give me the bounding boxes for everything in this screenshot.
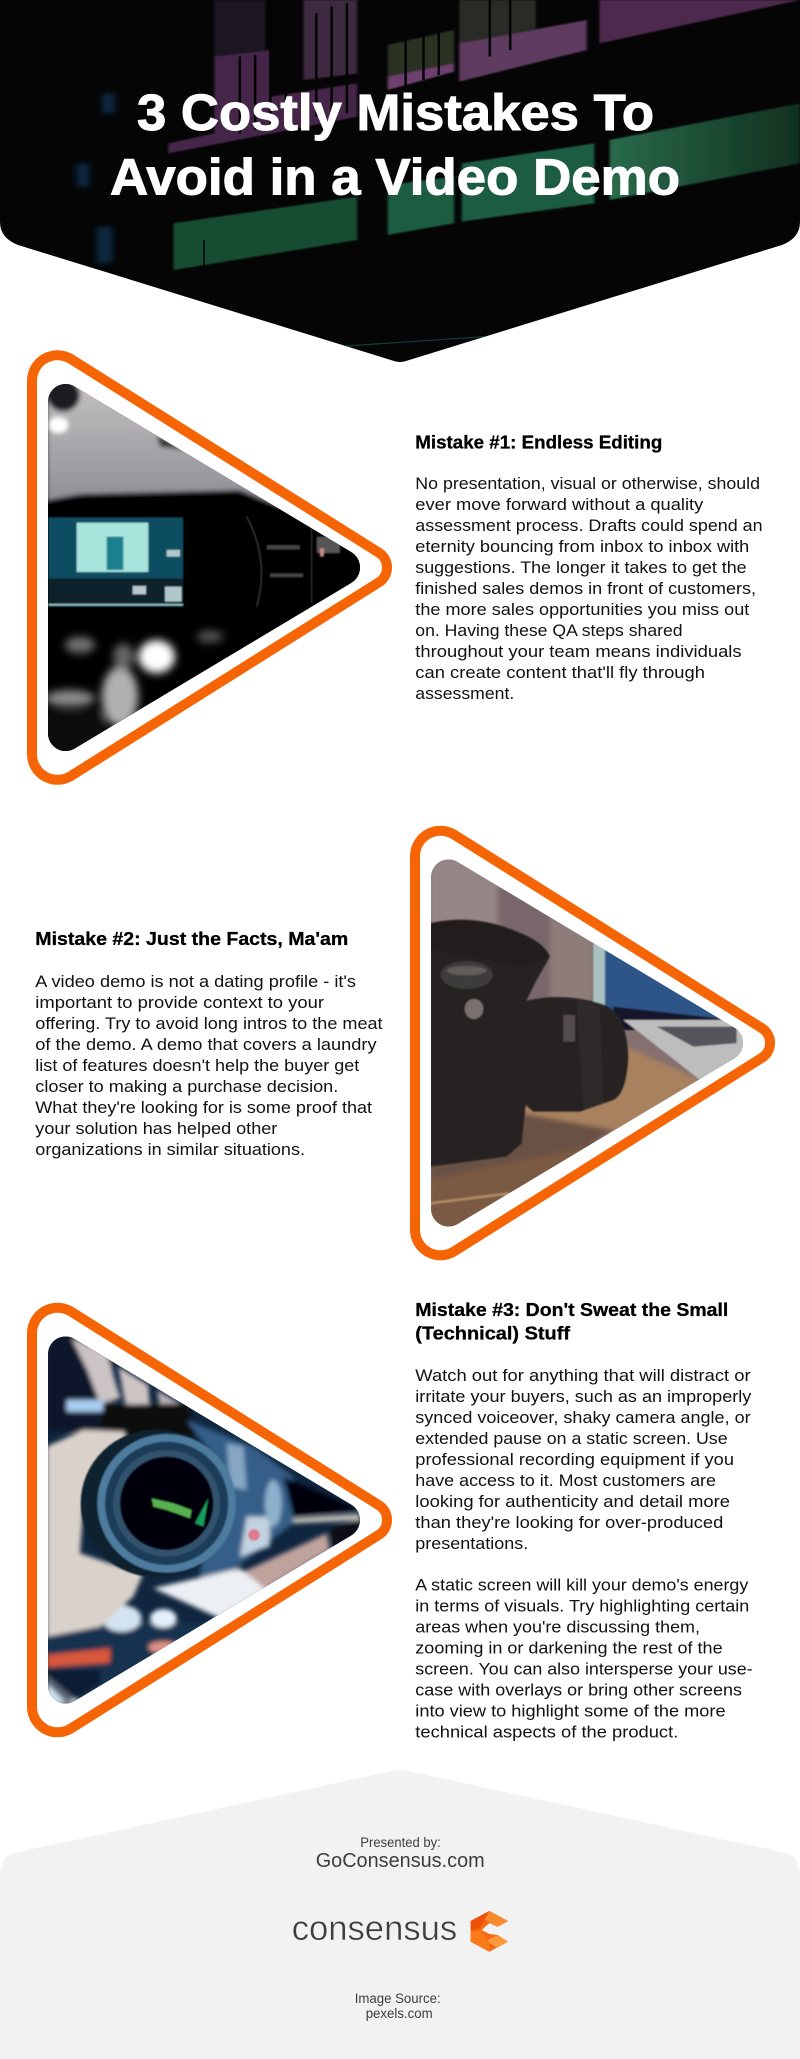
body text: paragraph 2: technical aspects of the product. [415, 1722, 678, 1742]
body text: paragraph 1: Watch out for anything that will distract or [415, 1366, 751, 1385]
body text: A video demo is not a dating profile - it's [35, 972, 356, 991]
body text: paragraph 1: have access to it. Most customers are [415, 1471, 716, 1490]
consensus wordmark: consensus [292, 1909, 457, 1948]
presented by: Presented by: [360, 1835, 441, 1850]
body text: paragraph 2: areas when you're discussing them, [415, 1618, 700, 1636]
body text: assessment process. Drafts could spend an [415, 516, 763, 535]
body text [35, 972, 383, 1159]
body text: offering. Try to avoid long intros to the meat [35, 1014, 383, 1033]
panel: mistake 2 [35, 831, 770, 1255]
body text: organizations in similar situations. [35, 1140, 305, 1159]
body text: No presentation, visual or otherwise, should [415, 474, 760, 493]
body text: paragraph 1: synced voiceover, shaky camera angle, or [415, 1408, 751, 1427]
body text: paragraph 2: into view to highlight some of the more [415, 1702, 726, 1720]
image source [355, 1991, 441, 2021]
heading: Mistake #2: Just the Facts, Ma'am [35, 928, 348, 949]
body text: suggestions. The longer it takes to get the [415, 558, 747, 577]
body text: list of features doesn't help the buyer get [35, 1056, 360, 1075]
body text: of the demo. A demo that covers a laundry [35, 1035, 377, 1054]
body text: paragraph 2: zooming in or darkening the rest of the [415, 1638, 723, 1658]
title [110, 84, 680, 206]
body text: paragraph 2: A static screen will kill your demo's energy [415, 1576, 749, 1594]
body text [415, 474, 763, 703]
body text: What they're looking for is some proof that [35, 1098, 372, 1117]
photo: DSLR camera on wooden table [430, 858, 747, 1230]
image source: pexels.com [366, 2006, 433, 2021]
heading: Mistake #3: Don't Sweat the Small [415, 1299, 728, 1320]
body text: paragraph 2: case with overlays or bring other screens [415, 1680, 742, 1700]
heading: Mistake #1: Endless Editing [415, 431, 662, 452]
body text: can create content that'll fly through [415, 663, 705, 682]
body text: paragraph 1: looking for authenticity and detail more [415, 1492, 730, 1511]
body text: paragraph 2: screen. You can also intersperse your use- [415, 1660, 753, 1678]
panel: mistake 3 [32, 1299, 753, 1742]
header banner [0, 0, 800, 363]
body text: finished sales demos in front of customers, [415, 579, 756, 598]
photo: hands holding camera lens [47, 1335, 362, 1707]
body text: eternity bouncing from inbox to inbox with [415, 537, 749, 556]
presented by: GoConsensus.com [316, 1850, 485, 1872]
image source: Image Source: [355, 1991, 441, 2006]
body text: paragraph 2 [415, 1576, 753, 1742]
icon: consensus logo [471, 1911, 508, 1952]
body text: paragraph 1: than they're looking for over-produced [415, 1513, 723, 1532]
body text: assessment. [415, 684, 514, 703]
body text: ever move forward without a quality [415, 495, 704, 514]
heading: (Technical) Stuff [415, 1322, 571, 1343]
body text: throughout your team means individuals [415, 642, 742, 661]
body text: paragraph 1: irritate your buyers, such as an improperly [415, 1387, 752, 1406]
triangle outline 2 [415, 831, 770, 1255]
body text: paragraph 1: extended pause on a static screen. Use [415, 1429, 728, 1448]
triangle outline 3 [32, 1308, 387, 1732]
body text: paragraph 1 [415, 1366, 752, 1553]
body text: important to provide context to your [35, 993, 324, 1012]
body text: closer to making a purchase decision. [35, 1077, 338, 1096]
title: Avoid in a Video Demo [110, 148, 680, 206]
photo: camera viewfinder [45, 378, 363, 757]
presented by [316, 1835, 485, 1872]
panel: mistake 1 [32, 355, 763, 780]
body text: on. Having these QA steps shared [415, 621, 683, 640]
body text: paragraph 1: presentations. [415, 1534, 528, 1553]
title: 3 Costly Mistakes To [137, 84, 654, 141]
body text: your solution has helped other [35, 1119, 278, 1138]
body text: paragraph 2: in terms of visuals. Try highlighting certain [415, 1596, 749, 1616]
triangle outline 1 [32, 355, 387, 780]
body text: paragraph 1: professional recording equipment if you [415, 1450, 734, 1469]
footer panel [0, 1770, 800, 2059]
heading [415, 1299, 728, 1343]
body text: the more sales opportunities you miss out [415, 600, 750, 619]
